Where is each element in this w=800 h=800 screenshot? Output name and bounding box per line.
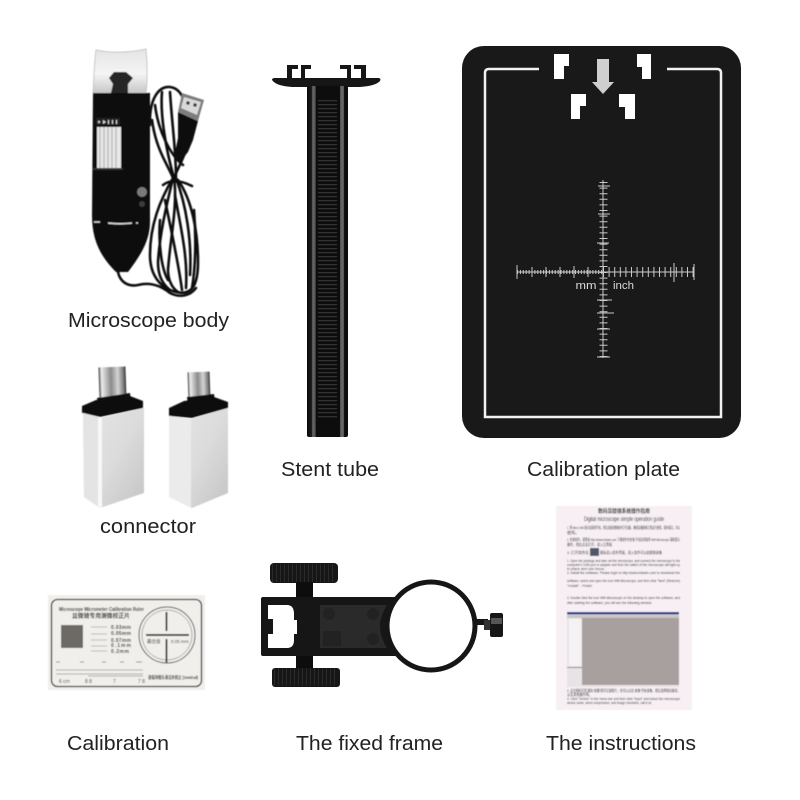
upper body text: 1. Open the package and take out the microscope, and connect the microscope to the (567, 558, 681, 563)
icon: transparent dome (93, 49, 147, 94)
panel: fixed frame (261, 563, 503, 687)
arrow (592, 59, 614, 94)
lower body text (567, 687, 681, 705)
measurement list: 0.05mm (111, 631, 132, 637)
lower body text: 4. Click "Device" in the menu bar and then click "Input" and select the microscope (567, 696, 681, 701)
ring (387, 582, 475, 670)
upper body text: in place and use focus. (567, 566, 605, 571)
plate body (462, 46, 741, 438)
label: The instructions: The instructions (546, 733, 696, 755)
icon: USB cable coil (118, 87, 198, 296)
panel: stent tube (272, 65, 380, 437)
icon: microscope handle (92, 93, 150, 272)
panel: instructions sheet (556, 506, 692, 710)
upper body text: 2. Install the software. Please login to http://www.inskam.com to download the (567, 570, 681, 575)
bracket cutout (268, 605, 297, 648)
panel: calibration card (48, 595, 205, 690)
upper body text: computer's USB port or adapter and then the switch of the microscope will light up (567, 562, 681, 567)
icon: left connector (82, 367, 144, 508)
top neck (296, 582, 313, 598)
card base (48, 595, 205, 690)
bottom neck (296, 655, 313, 669)
label: Microscope body: Microscope body (68, 310, 229, 332)
ring screw (474, 613, 503, 637)
reticle circle: 最佳值 (147, 638, 161, 645)
upper body text: 2. 安装软件，请登录 http://www.inskam.com 下载软件并安装 手机应用程序 Wifi Microscope 请按提示 (567, 536, 680, 542)
icon: tube (307, 86, 348, 437)
lower ruler: 8 8 (85, 679, 92, 685)
card footnote: 请保持镜头清洁并校正 (1mm/cal) (148, 674, 198, 681)
reticle circle (139, 607, 195, 663)
lower body text: device name, word compression, and image resolution, call it ok. (567, 700, 652, 705)
icon: right connector (169, 372, 228, 508)
measurement list: 0.1mm (111, 643, 132, 649)
software screenshot (567, 612, 679, 687)
bracket plate (261, 597, 396, 656)
label: Calibration: Calibration (67, 733, 169, 755)
measurement list: 0.2mm (111, 649, 130, 655)
upper body text: 操作，然后点击打开，进入主界面 (567, 541, 612, 547)
sheet title (584, 507, 664, 523)
lower ruler: 7 8 (138, 679, 145, 685)
icon: ribbed groove (318, 100, 337, 420)
icon: flange (272, 78, 380, 87)
card heading: Microscope Micrometer Calibration Ruler (59, 607, 145, 613)
cross scale (517, 180, 694, 358)
measurement list: 0.07mm (111, 638, 132, 644)
reticle circle: 0.05 mm (171, 639, 189, 644)
panel: calibration plate (462, 46, 741, 438)
label: Calibration plate: Calibration plate (527, 459, 680, 481)
card border (52, 600, 202, 686)
inset panel (320, 605, 387, 648)
card heading (59, 607, 145, 620)
upper body text: 1. 将 Micro USB 接头连接到手机，然后连接显微镜并打开设备，确保设备能够正常运行使用，保持清洁，可以 (567, 524, 680, 530)
bottom knob (272, 668, 340, 687)
upper body text: "Install" - Finish (567, 583, 592, 588)
label: Stent tube: Stent tube (281, 459, 379, 481)
card heading: 显微镜专用测微校正片 (72, 612, 130, 620)
white frame (485, 69, 721, 417)
icon: silver ring (94, 222, 138, 224)
inset holes (323, 608, 379, 646)
panel: connectors (82, 367, 228, 508)
lower ruler: 7 (113, 679, 116, 685)
sheet title: Digital microscope simple operation guide (584, 517, 664, 523)
panel: microscope body (92, 49, 204, 296)
icon: focus window (93, 118, 123, 170)
sheet (556, 506, 692, 710)
upper body text (567, 524, 681, 605)
icon: buttons (137, 187, 147, 207)
icon: lens nub (109, 72, 133, 93)
top knob (270, 563, 338, 583)
upper body text: 使用。 (567, 529, 579, 535)
upper body text: software, select and open the icon Wifi Microscope, and then click "Next" (Reserve) (567, 578, 681, 583)
upper body text: 3. Double click the icon Wifi Microscope on the desktop to open the software, and (567, 595, 680, 600)
measurement list: 0.03mm (111, 625, 132, 631)
sheet title: 数码显微镜系统操作指南 (598, 507, 650, 515)
label: connector: connector (100, 516, 196, 538)
icon: top clips (287, 65, 366, 78)
lower body text: 以及其他操作等。 (567, 691, 592, 697)
lower body text: 4. 点击相机可用 图标“拍摄”即可记录照片，也可以点击“录像”开始录像，然后选择保存路径。 (567, 687, 680, 693)
lower ruler (56, 662, 145, 685)
upper body text: 图标进入软件界面，进入软件可以拍照和录像 (600, 549, 662, 555)
measurement list (91, 625, 132, 655)
mounting slots (554, 54, 651, 119)
grey square target (61, 625, 83, 648)
upper body text: after starting the software, you will see the following window: (567, 600, 652, 605)
icon: USB plug (174, 93, 204, 162)
upper body text: 3. 打开软件后 (567, 549, 589, 555)
panel: calibration plate: inch (613, 280, 634, 292)
lower ruler: 6 cm (59, 679, 70, 685)
scale labels: mm (576, 280, 596, 292)
label: The fixed frame: The fixed frame (296, 733, 443, 755)
